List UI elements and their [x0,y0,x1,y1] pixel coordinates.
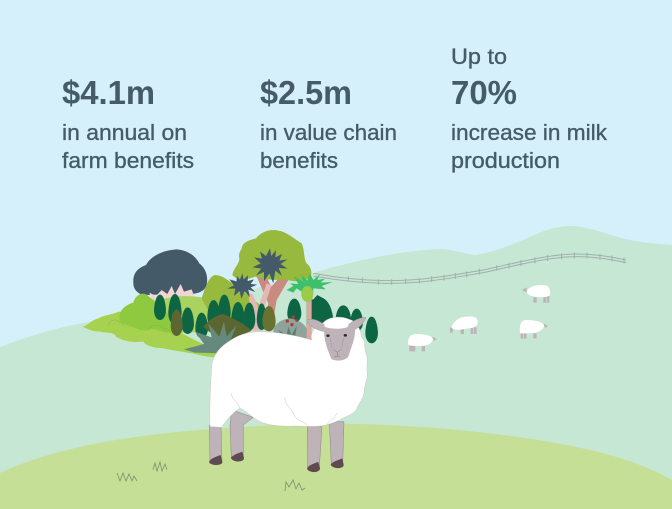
hooves [209,452,344,472]
bush outlines [108,320,173,335]
far legs [230,410,253,458]
back hill [0,226,672,509]
pale trunks [149,284,195,300]
tree fern crown large [253,248,287,283]
main sheep [209,317,367,472]
olive cypress [171,309,183,336]
left ground bushes [83,312,220,357]
value: $4.1m [62,74,155,111]
olive cypress right [262,306,276,331]
olive shrub [202,275,260,323]
flax plant [184,322,247,353]
fence [313,253,626,285]
nikau palm fronds [287,273,333,293]
near back leg [209,425,222,462]
native planting [83,230,378,357]
grass tuft left [117,473,137,481]
face [324,327,355,361]
distant sheep 2 [450,316,478,334]
stat: value chain benefits [260,74,397,173]
bright green bush [119,294,172,332]
nikau fruit [301,286,313,302]
large tree canopy [232,230,311,281]
fleece body [210,317,367,427]
nikau palm trunk [307,298,312,340]
description line 2: farm benefits [62,148,194,173]
ears [307,317,366,332]
stat: annual on farm benefits [62,74,194,173]
description line 2: production [451,148,560,173]
distant sheep 3 [520,320,548,339]
description line 2: benefits [260,148,338,173]
tree fern trunks [248,283,272,331]
grass tuft front [285,480,305,491]
value: 70% [451,74,517,111]
description: in annual on [62,120,187,145]
cypress row [154,294,378,343]
front hill [0,424,672,509]
front legs [307,422,344,468]
grey shrub with red flowers [273,316,310,338]
distant sheep 4 [522,285,550,303]
stat: milk production [451,44,608,173]
fleece folds [231,393,337,425]
value: $2.5m [260,74,352,111]
prefix: Up to [451,44,507,69]
eyes and muzzle [326,334,347,357]
dark mound behind flax [203,314,252,343]
large tree trunk [257,275,288,330]
wool tuft [324,317,348,329]
tree fern crown small [227,273,257,299]
distant sheep 1 [408,334,437,351]
dark tree [133,249,207,295]
lime ground [155,296,247,333]
grass tuft centre [153,462,167,471]
description: increase in milk [451,120,608,145]
description: in value chain [260,120,397,145]
